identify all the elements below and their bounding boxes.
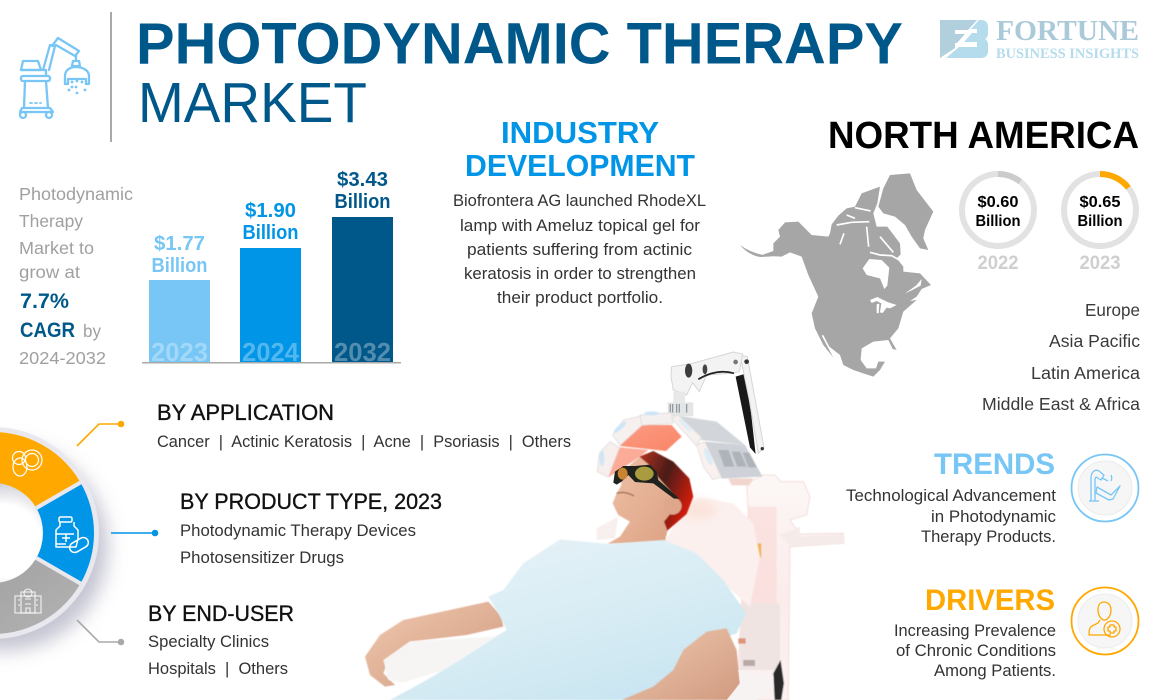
- CAGR text block: by: [83, 321, 101, 341]
- protective glasses: [613, 465, 679, 499]
- industry development text: Biofrontera AG launched RhodeXL: [453, 192, 706, 210]
- segment text: by product type: [180, 489, 442, 567]
- donut: segments: [0, 427, 108, 651]
- icon: trends: [1072, 454, 1138, 522]
- bar 2032: $3.43: [337, 169, 388, 191]
- CAGR text block: [19, 184, 133, 368]
- CAGR text block: Market to: [19, 238, 94, 258]
- ring: 2022 value: 2022: [978, 253, 1018, 274]
- device arm: [668, 352, 764, 454]
- bar 2023: $1.77: [154, 233, 205, 255]
- heading: industry development: [465, 115, 695, 183]
- ring: 2023 value: $0.65: [1080, 194, 1121, 211]
- left arm: [365, 602, 503, 687]
- industry development text: patients suffering from actinic: [467, 241, 692, 259]
- ring: 2023 value: [1064, 174, 1136, 274]
- connector: product type: [111, 530, 158, 536]
- panel: trends: TRENDS: [934, 448, 1055, 481]
- bar 2023: [149, 233, 210, 367]
- segment text: by application: BY APPLICATION: [157, 400, 334, 425]
- arm rest: [383, 631, 508, 683]
- industry development text: [453, 192, 706, 307]
- panel: drivers: [894, 584, 1138, 680]
- segment text: by end-user: Hospitals | Others: [148, 660, 288, 678]
- segment: product type: [36, 482, 94, 584]
- icon: phototherapy machine: [20, 38, 89, 118]
- heading: industry development: INDUSTRY: [501, 115, 659, 150]
- bar 2024: Billion: [242, 222, 298, 244]
- right arm: [622, 628, 740, 700]
- title: [136, 12, 903, 135]
- map: north america: [740, 173, 933, 377]
- ring: 2022 value: [962, 174, 1034, 274]
- CAGR text block: Therapy: [19, 211, 83, 231]
- logo: Fortune Business Insights: BUSINESS INSIGHTS: [996, 46, 1139, 62]
- bar 2023: 2023: [151, 337, 208, 367]
- segment text: by product type: BY PRODUCT TYPE, 2023: [180, 489, 442, 514]
- title: MARKET: [138, 71, 367, 135]
- panel: drivers: DRIVERS: [925, 584, 1055, 617]
- head: [607, 451, 693, 544]
- CAGR text block: Photodynamic: [19, 184, 133, 204]
- list: other regions: Latin America: [1031, 363, 1140, 383]
- connector: application: [77, 422, 124, 446]
- heading: industry development: DEVELOPMENT: [465, 148, 695, 183]
- bar 2024: 2024: [242, 337, 300, 367]
- panel: drivers: Among Patients.: [934, 662, 1056, 680]
- segment text: by end-user: BY END-USER: [148, 601, 294, 626]
- bar 2023: Billion: [152, 255, 208, 277]
- heading: north america: NORTH AMERICA: [828, 115, 1139, 157]
- panel: drivers: of Chronic Conditions: [896, 642, 1056, 660]
- segment text: by product type: Photosensitizer Drugs: [180, 549, 344, 567]
- light panels: [597, 411, 763, 485]
- CAGR text block: 7.7%: [20, 290, 69, 313]
- segment text: by product type: Photodynamic Therapy Devices: [180, 522, 416, 540]
- segment text: by application: [157, 400, 571, 451]
- bar 2024: [240, 200, 301, 367]
- panel: trends: Therapy Products.: [921, 528, 1056, 546]
- bar chart: market size: [142, 169, 401, 367]
- bar 2024: $1.90: [245, 200, 296, 222]
- photo: patient under light therapy device: [365, 352, 844, 700]
- list: other regions: Middle East & Africa: [982, 394, 1140, 414]
- panel: trends: in Photodynamic: [931, 508, 1056, 526]
- industry development text: lamp with Ameluz topical gel for: [460, 217, 701, 235]
- segment text: by end-user: Specialty Clinics: [148, 633, 269, 651]
- gown: [390, 539, 746, 700]
- bar 2032: 2032: [334, 337, 391, 367]
- pillow: [597, 497, 760, 607]
- industry development text: keratosis in order to strengthen: [464, 265, 696, 283]
- logo: Fortune Business Insights: FORTUNE: [996, 15, 1139, 47]
- device stand and handle: [737, 475, 844, 700]
- bar 2032: Billion: [334, 191, 390, 213]
- segment: application: [0, 432, 80, 508]
- ring: 2022 value: Billion: [976, 213, 1020, 230]
- segment: end user: [0, 558, 80, 634]
- segment text: by application: Cancer | Actinic Keratosis | Acne | Psoriasis | Others: [157, 433, 571, 451]
- panel: trends: Technological Advancement: [846, 487, 1056, 505]
- panel: drivers: Increasing Prevalence: [894, 622, 1056, 640]
- header divider: [110, 12, 112, 142]
- CAGR text block: CAGR: [20, 319, 75, 342]
- chair seat: [727, 670, 773, 700]
- list: other regions: Europe: [1085, 300, 1140, 320]
- CAGR text block: 2024-2032: [19, 348, 106, 368]
- list: other regions: [982, 300, 1140, 414]
- ring: 2023 value: Billion: [1078, 213, 1122, 230]
- ring: 2023 value: 2023: [1080, 253, 1120, 274]
- industry development text: their product portfolio.: [497, 289, 663, 307]
- CAGR text block: grow at: [19, 262, 80, 282]
- panel: trends: [846, 448, 1138, 546]
- ring: 2022 value: $0.60: [978, 194, 1019, 211]
- bar 2032: [332, 169, 393, 367]
- icon: drivers: [1072, 588, 1138, 654]
- list: other regions: Asia Pacific: [1049, 331, 1140, 351]
- segment text: by end-user: [148, 601, 294, 678]
- logo: Fortune Business Insights: [940, 15, 1139, 62]
- connector: end user: [77, 620, 124, 644]
- title: PHOTODYNAMIC THERAPY: [136, 12, 903, 76]
